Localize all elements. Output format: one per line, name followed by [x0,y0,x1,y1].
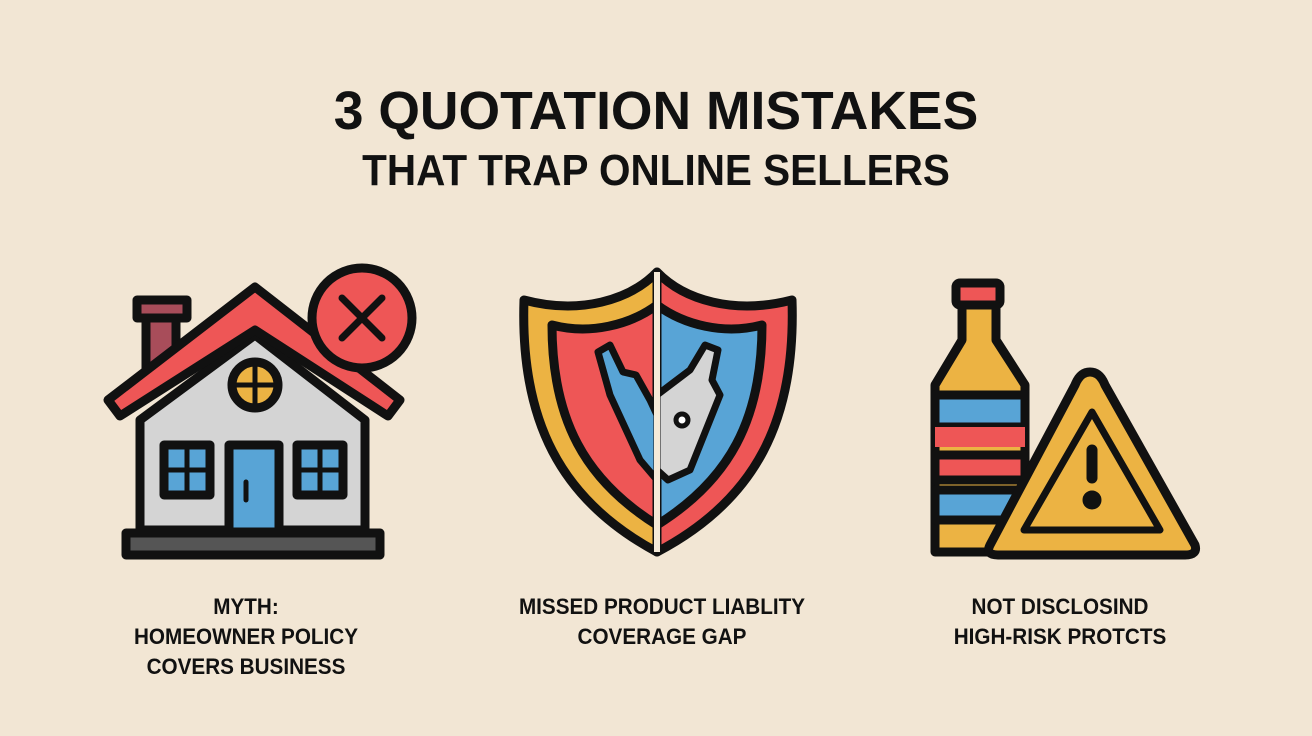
caption: homeowner myth: HOMEOWNER POLICY [134,624,358,649]
caption: product liability: COVERAGE GAP [578,624,746,649]
subtitle: THAT TRAP ONLINE SELLERS [362,146,950,195]
caption: high-risk products: HIGH-RISK PROTCTS [954,624,1166,649]
icon: split shield [524,272,792,552]
icon: bottle with warning triangle [935,283,1196,555]
caption: homeowner myth: COVERS BUSINESS [147,654,345,679]
caption: product liability [519,594,805,649]
title: 3 QUOTATION MISTAKES [334,81,978,141]
caption: high-risk products: NOT DISCLOSIND [972,594,1148,619]
caption: homeowner myth: MYTH: [213,594,279,619]
icon: house with x [108,268,412,555]
caption: homeowner myth [134,594,358,679]
caption: high-risk products [954,594,1166,649]
caption: product liability: MISSED PRODUCT LIABLITY [519,594,805,619]
